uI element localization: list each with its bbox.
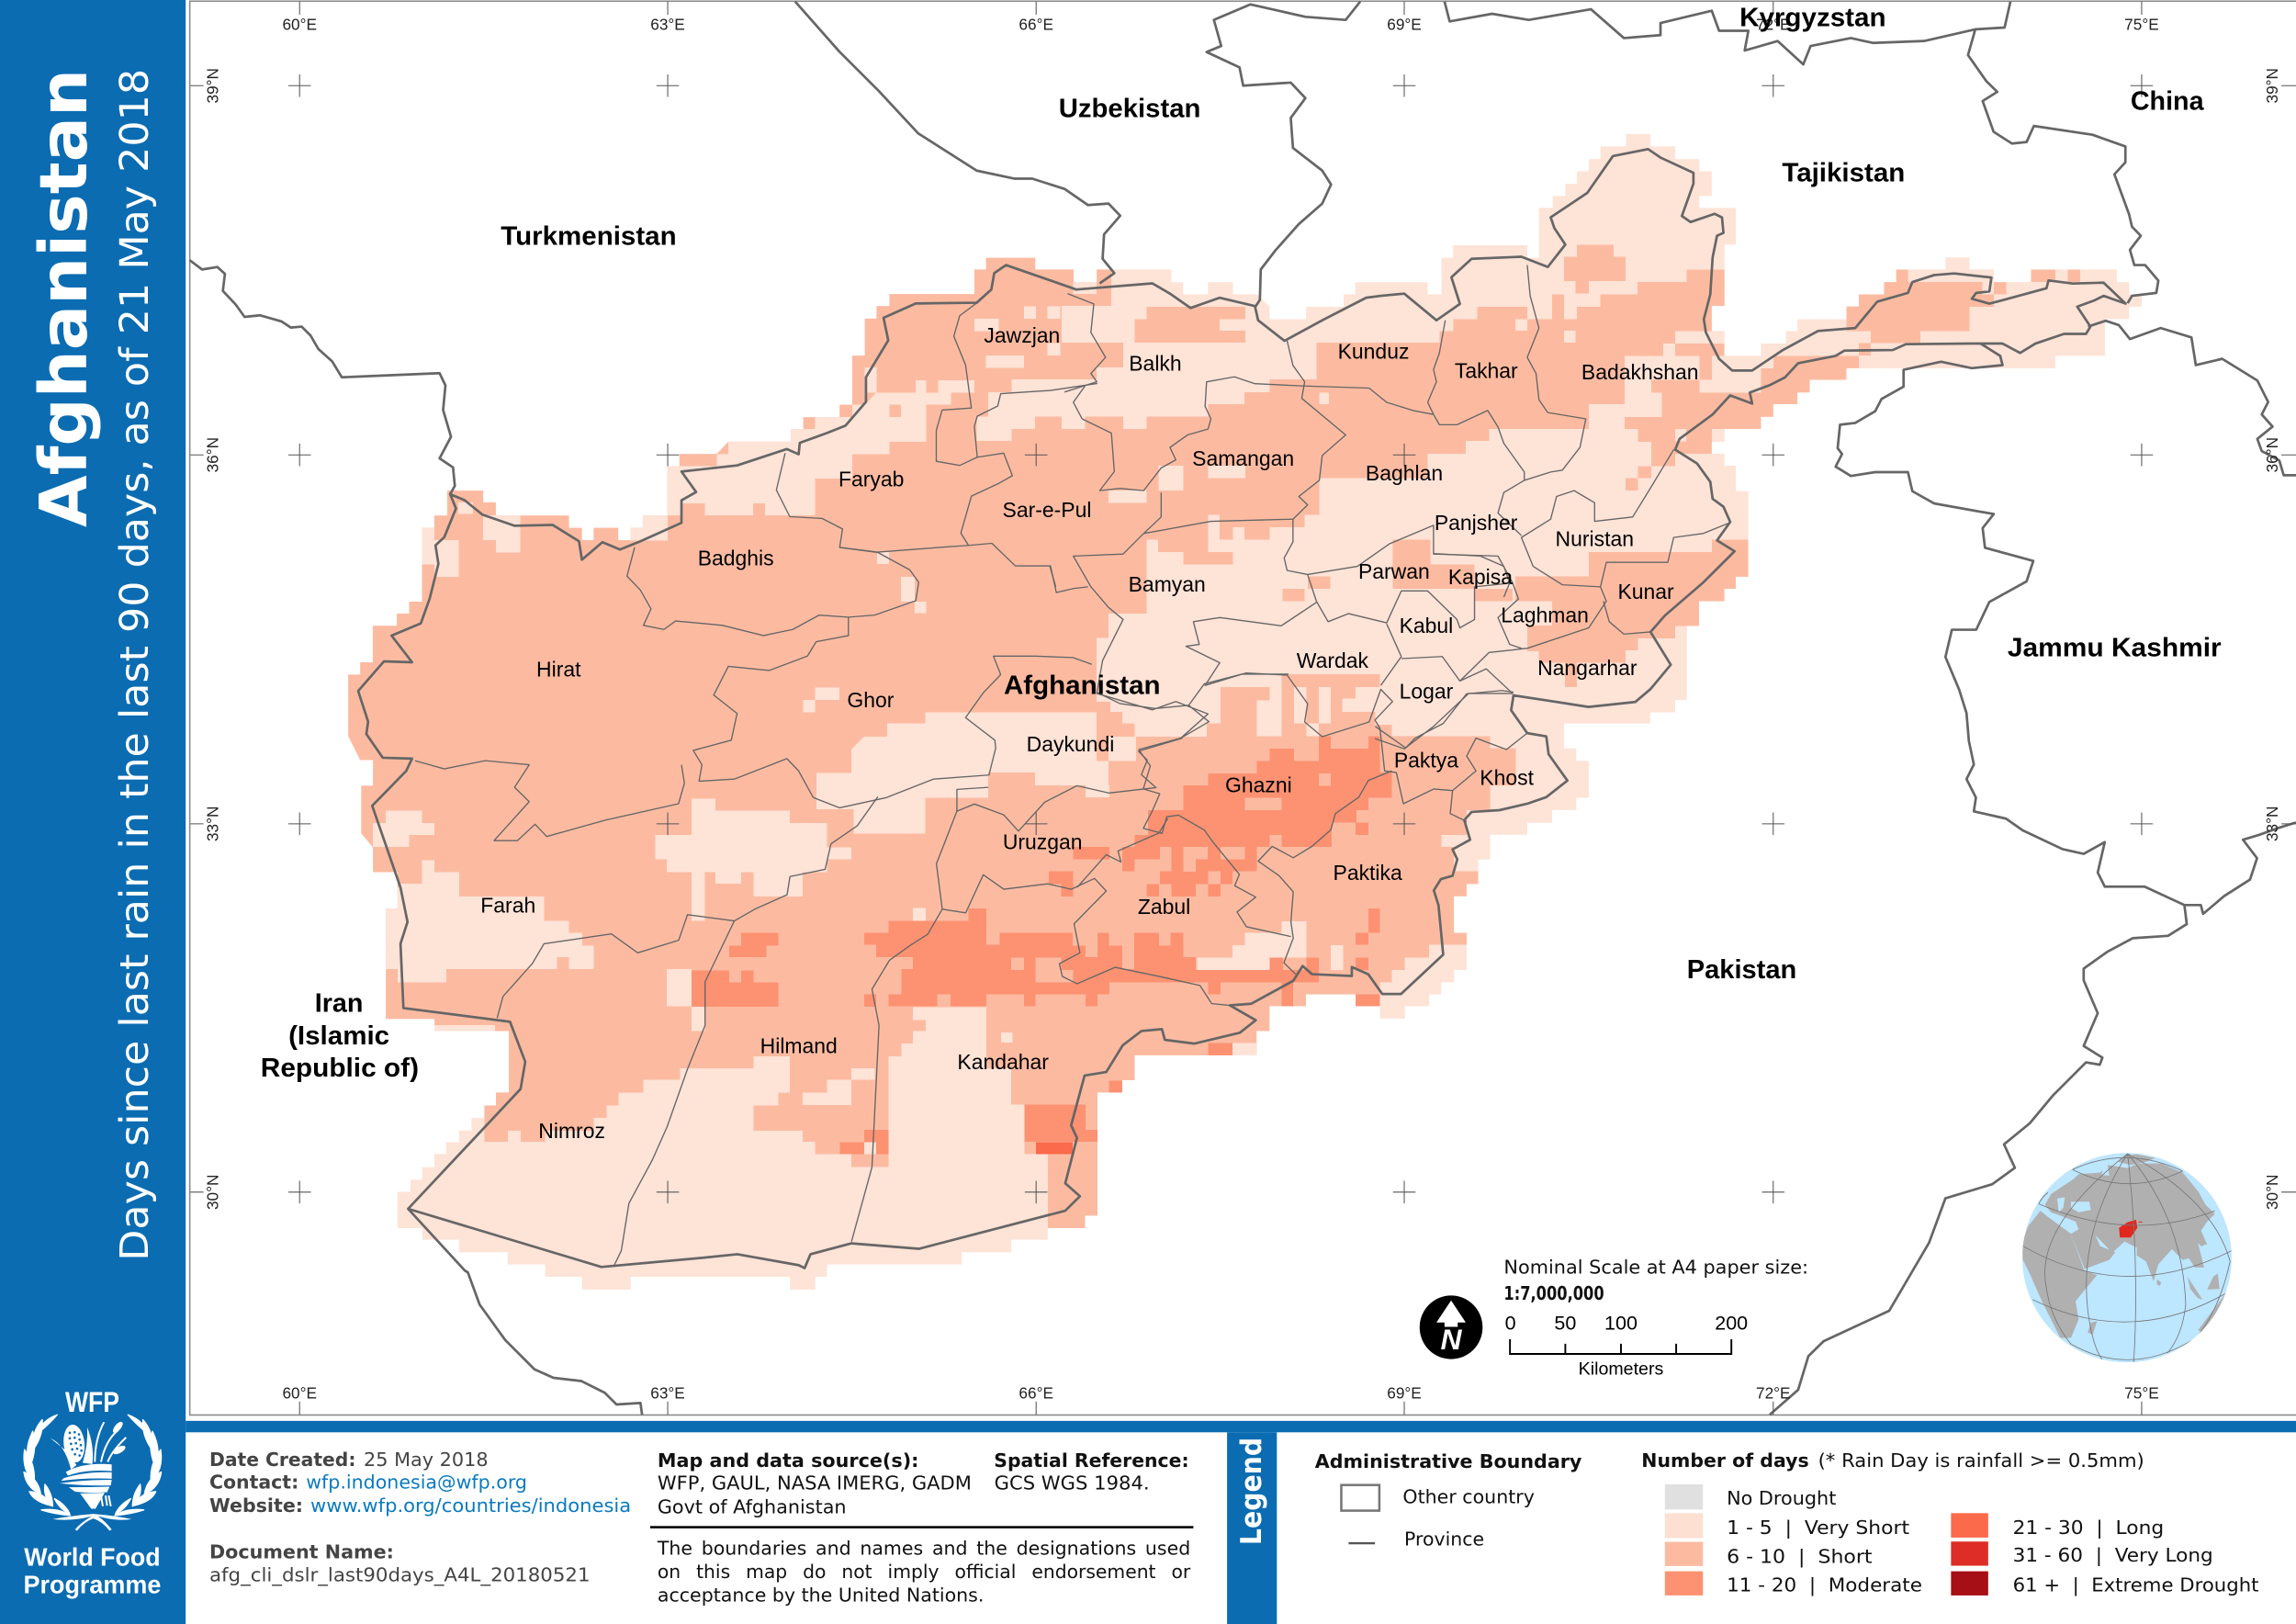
metadata: sources: acceptance by the United Nations. [658,1584,984,1606]
country labels: Republic of) [261,1054,419,1083]
icon: north arrow: N [1441,1323,1463,1356]
legend: number of days: 31 - 60 | Very Long [2013,1544,2213,1566]
province labels: Kunduz [1338,340,1409,364]
province labels: Ghor [847,688,895,712]
metadata: document info: wfp.indonesia@wfp.org [306,1472,527,1494]
sidebar [0,0,186,1624]
legend: number of days: 11 - 20 | Moderate [1727,1574,1922,1596]
province labels: Balkh [1129,351,1182,375]
province labels: Jawzjan [984,323,1060,347]
province labels: Paktika [1334,861,1402,885]
province labels [480,323,1698,1143]
country labels: Afghanistan [1004,671,1161,701]
graticule labels: 39°N [204,68,222,103]
legend tab: Legend [1235,1438,1268,1545]
metadata: sources [650,1449,1193,1606]
country labels: Turkmenistan [501,221,677,251]
graticule labels [204,16,2281,1403]
WFP logo: WFP [65,1386,119,1418]
graticule labels: 39°N [2263,68,2281,103]
graticule labels: 36°N [2263,437,2281,472]
metadata: document info: 25 May 2018 [364,1449,489,1471]
WFP logo: Programme [24,1571,161,1599]
graticule labels: 69°E [1387,16,1422,34]
metadata: document info: www.wfp.org/countries/indonesia [310,1494,631,1517]
footer band [186,1421,2296,1432]
graticule labels: 30°N [204,1175,222,1210]
metadata: sources: The boundaries and names and the designations used [657,1538,1190,1560]
legend: number of days: 61 + | Extreme Drought [2013,1574,2259,1596]
province labels: Faryab [838,467,904,491]
graticule labels: 33°N [204,806,222,841]
province labels: Sar-e-Pul [1003,498,1091,522]
country labels: Uzbekistan [1059,95,1200,124]
province labels: Nimroz [538,1119,605,1143]
province labels: Nuristan [1556,527,1634,551]
scale text: 1:7,000,000 [1503,1282,1604,1304]
metadata: document info: Document Name: [209,1540,394,1562]
country labels: Tajikistan [1782,159,1905,188]
country labels: China [2131,87,2205,117]
graticule crosses and ticks [190,2,2296,1415]
graticule labels: 66°E [1019,16,1053,34]
legend: number of days: (* Rain Day is rainfall >= 0.5mm) [1818,1449,2144,1472]
legend: number of days: No Drought [1727,1487,1836,1509]
metadata: sources: Spatial Reference: [994,1449,1189,1472]
province labels: Khost [1480,766,1535,790]
metadata: document info: Contact: [209,1472,298,1494]
scale bar: 50 [1554,1313,1576,1335]
scale bar: 0 [1505,1313,1516,1335]
country labels: Pakistan [1687,955,1796,985]
legend: administrative boundary [1315,1450,1581,1551]
province labels: Hilmand [760,1033,838,1057]
metadata: sources: on this map do not imply official endorsement or [658,1561,1191,1583]
province labels: Bamyan [1129,572,1206,596]
graticule labels: 60°E [282,1384,317,1403]
scale text: Nominal Scale at A4 paper size: [1503,1256,1808,1278]
scale bar: 200 [1715,1313,1748,1335]
legend: administrative boundary: Administrative Boundary [1315,1450,1581,1472]
graticule labels: 66°E [1019,1384,1053,1403]
icon: north arrow [1420,1295,1482,1359]
metadata: document info: Date Created: [209,1449,355,1471]
scale bar: 100 [1604,1313,1638,1335]
WFP logo: World Food [24,1542,161,1571]
country labels [261,4,2222,1083]
metadata: sources: Govt of Afghanistan [658,1496,847,1518]
graticule labels: 33°N [2263,806,2281,841]
graticule labels: 75°E [2124,16,2159,34]
legend: number of days: 6 - 10 | Short [1727,1546,1873,1568]
province labels: Kunar [1617,580,1674,603]
province labels: Nangarhar [1537,656,1638,680]
title: Afghanistan [25,69,102,527]
legend: administrative boundary: Other country [1402,1486,1535,1508]
country labels: (Islamic [288,1021,389,1051]
country labels: Iran [315,989,363,1019]
legend: number of days: 21 - 30 | Long [2013,1517,2164,1539]
province labels: Badghis [698,546,774,570]
graticule labels: 36°N [204,437,222,472]
province labels: Daykundi [1027,732,1114,756]
province labels: Baghlan [1366,461,1443,485]
inset globe [2022,1153,2234,1362]
raster: days since last rain [337,118,2167,1303]
map frame [190,1,2296,1415]
province labels: Logar [1400,680,1454,704]
scale text [1503,1256,1808,1304]
country boundaries [190,2,2296,1415]
scale bar: Kilometers [1579,1359,1663,1379]
province labels: Hirat [536,658,581,682]
province labels: Samangan [1192,446,1294,470]
metadata: document info: Website: [209,1494,303,1517]
legend: number of days: Number of days [1641,1449,1809,1472]
province labels: Uruzgan [1003,830,1083,854]
scale bar [1505,1313,1748,1379]
graticule labels: 75°E [2124,1384,2159,1403]
province labels: Kandahar [957,1050,1049,1074]
subtitle: Days since last rain in the last 90 days, as of 21 May 2018 [112,69,158,1261]
province labels: Zabul [1138,895,1190,919]
metadata: sources: GCS WGS 1984. [995,1472,1150,1494]
province labels: Badakhshan [1581,360,1698,384]
province labels: Kapisa [1448,565,1513,589]
legend: number of days: 1 - 5 | Very Short [1727,1517,1909,1539]
country labels: Kyrgyzstan [1739,4,1886,33]
graticule labels: 72°E [1756,1384,1791,1403]
province labels: Ghazni [1225,773,1292,797]
province boundaries [415,265,1729,1265]
metadata: document info: afg_cli_dslr_last90days_A4L_20180521 [209,1564,591,1586]
graticule labels: 72°E [1756,16,1791,34]
graticule labels: 30°N [2263,1175,2281,1210]
metadata: sources: WFP, GAUL, NASA IMERG, GADM [658,1472,972,1494]
province labels: Panjsher [1435,511,1518,535]
metadata: sources: Map and data source(s): [658,1449,918,1472]
legend: administrative boundary: Province [1404,1528,1484,1551]
legend tab [1227,1432,1277,1624]
graticule labels: 60°E [282,16,317,34]
WFP logo [24,1386,162,1599]
metadata: document info [209,1449,631,1586]
graticule labels: 63°E [650,16,685,34]
province labels: Paktya [1394,748,1458,772]
graticule labels: 69°E [1387,1384,1422,1403]
legend: number of days [1641,1449,2259,1596]
country labels: Jammu Kashmir [2008,633,2222,662]
province labels: Parwan [1358,559,1430,583]
province labels: Laghman [1501,603,1589,627]
province labels: Takhar [1455,358,1518,382]
province labels: Wardak [1297,648,1369,672]
province labels: Farah [480,893,535,917]
graticule labels: 63°E [650,1384,685,1403]
province labels: Kabul [1400,614,1453,637]
